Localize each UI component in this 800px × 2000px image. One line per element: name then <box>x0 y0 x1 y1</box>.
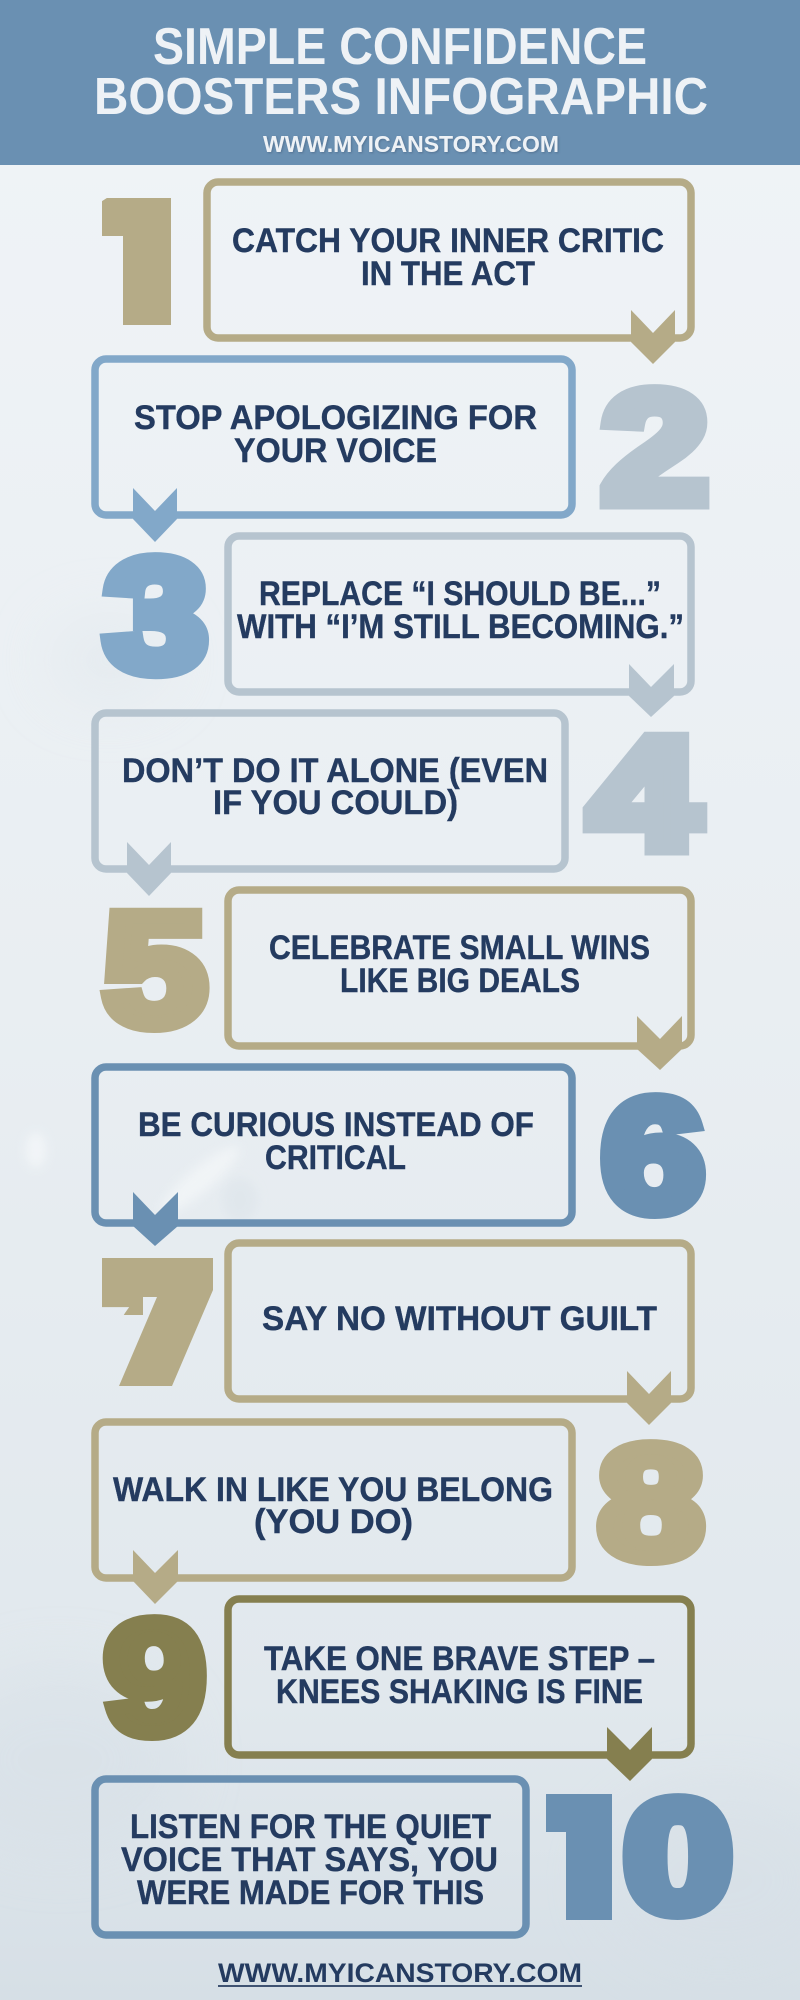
text 9: KNEES SHAKING IS FINE <box>276 1673 643 1711</box>
text 1 <box>232 222 664 293</box>
box 2 <box>95 359 572 515</box>
text 8 <box>113 1471 553 1541</box>
text 10: VOICE THAT SAYS, YOU <box>121 1841 498 1879</box>
arrow 8 <box>133 1550 178 1604</box>
text 6: BE CURIOUS INSTEAD OF <box>138 1106 534 1144</box>
arrow 7 <box>627 1371 671 1425</box>
text 8: WALK IN LIKE YOU BELONG <box>113 1471 553 1509</box>
box 7 <box>228 1243 691 1399</box>
text 10 <box>121 1808 498 1912</box>
text 7: SAY NO WITHOUT GUILT <box>262 1300 657 1338</box>
number 9: 9 <box>105 1590 205 1766</box>
arrow 6 <box>133 1192 178 1246</box>
text 2: STOP APOLOGIZING FOR <box>134 399 537 437</box>
step 7 <box>100 1231 691 1425</box>
number 4: 4 <box>589 706 699 882</box>
step 8 <box>95 1415 703 1604</box>
step 5 <box>104 882 691 1070</box>
box 1 <box>207 182 691 338</box>
text 1: CATCH YOUR INNER CRITIC <box>232 222 664 260</box>
arrow 5 <box>637 1016 682 1070</box>
number 1: 1 <box>96 170 188 354</box>
step 2 <box>95 359 708 542</box>
text 8: (YOU DO) <box>254 1503 413 1541</box>
box 6 <box>95 1067 572 1223</box>
text 6 <box>138 1106 534 1177</box>
title <box>94 18 708 126</box>
arrow 2 <box>133 488 177 542</box>
text 2 <box>134 399 537 470</box>
step 6 <box>95 1067 704 1246</box>
text 10: WERE MADE FOR THIS <box>137 1874 484 1912</box>
step 1 <box>96 170 691 364</box>
box 3 <box>228 536 691 692</box>
header band <box>0 0 800 165</box>
number 2: 2 <box>602 360 708 536</box>
text 4: DON’T DO IT ALONE (EVEN <box>122 752 548 790</box>
text 5: LIKE BIG DEALS <box>340 962 580 1000</box>
website url: WWW.MYICANSTORY.COM <box>263 131 559 157</box>
text 1: IN THE ACT <box>361 255 535 293</box>
arrow 1 <box>631 310 675 364</box>
box 5 <box>228 890 691 1046</box>
box 4 <box>95 713 565 869</box>
number 8: 8 <box>599 1415 703 1591</box>
text 5: CELEBRATE SMALL WINS <box>269 929 650 967</box>
arrow 3 <box>629 664 674 717</box>
box 8 <box>95 1422 572 1578</box>
text 3: WITH “I’M STILL BECOMING.” <box>237 608 684 646</box>
text 4: IF YOU COULD) <box>213 784 458 822</box>
number 10: 0 <box>624 1769 732 1945</box>
number 6: 6 <box>602 1068 704 1244</box>
text 4 <box>122 752 548 822</box>
number 5: 5 <box>104 882 206 1058</box>
box 9 <box>228 1599 691 1755</box>
box 10 <box>95 1779 526 1935</box>
number 7: 7 <box>100 1231 216 1415</box>
text 10: LISTEN FOR THE QUIET <box>130 1808 491 1846</box>
number 10 <box>546 1793 734 1920</box>
title: SIMPLE CONFIDENCE <box>153 18 647 76</box>
step 9 <box>105 1590 691 1781</box>
text 6: CRITICAL <box>265 1139 406 1177</box>
title: BOOSTERS INFOGRAPHIC <box>94 68 708 126</box>
number 3: 3 <box>105 528 207 704</box>
step 3 <box>105 528 691 717</box>
text 9: TAKE ONE BRAVE STEP – <box>264 1640 655 1678</box>
arrow 4 <box>127 842 171 896</box>
number 10: 1 <box>537 1765 629 1949</box>
text 5 <box>269 929 650 1000</box>
text 3: REPLACE “I SHOULD BE...” <box>259 575 661 613</box>
text 3 <box>237 575 684 646</box>
footer website link: WWW.MYICANSTORY.COM <box>218 1958 582 1988</box>
arrow 9 <box>607 1727 652 1781</box>
step 10 <box>91 1775 734 1939</box>
text 2: YOUR VOICE <box>234 432 437 470</box>
step 4 <box>95 706 699 896</box>
text 9 <box>264 1640 655 1711</box>
